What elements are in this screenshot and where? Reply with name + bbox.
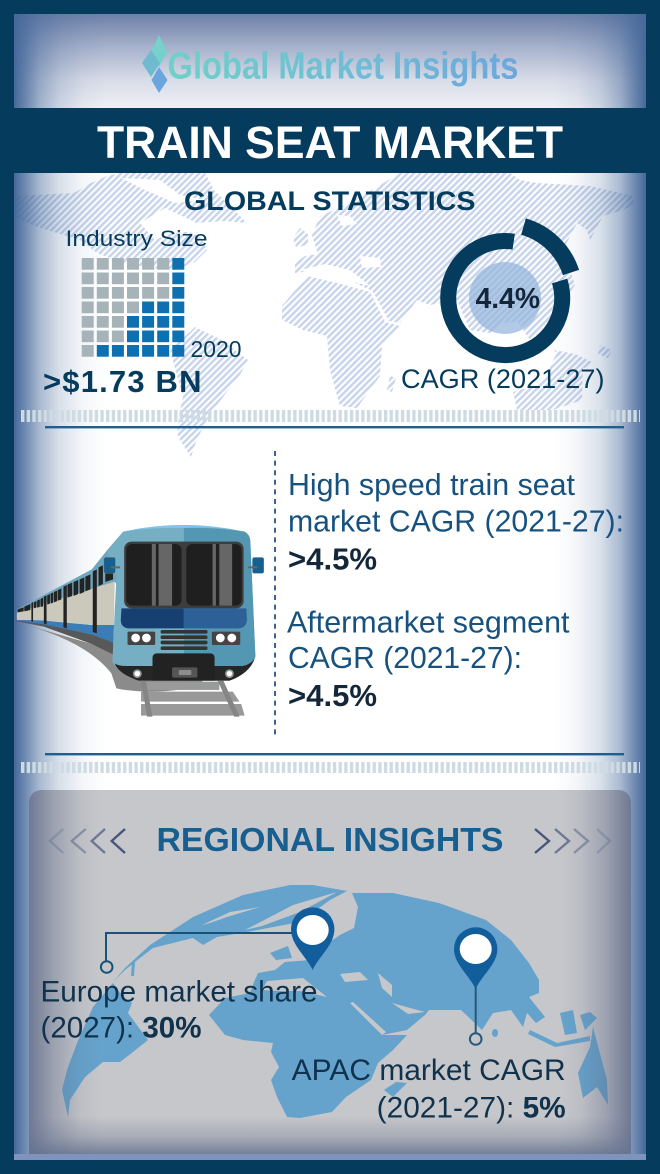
panel: industry size xyxy=(43,226,242,399)
divider xyxy=(45,753,624,755)
text: apac cagr: (2021-27): 5% xyxy=(377,1091,566,1124)
callout: europe xyxy=(40,907,334,1045)
label: industry size: Industry Size xyxy=(66,226,208,251)
globe map xyxy=(62,885,608,1118)
header panel with logo xyxy=(14,14,646,108)
heading: global statistics: GLOBAL STATISTICS xyxy=(184,185,476,216)
icon: left chevrons xyxy=(50,829,125,853)
heading: regional insights: REGIONAL INSIGHTS xyxy=(156,821,504,859)
icon: apac pin xyxy=(454,927,497,989)
panel: regional insights xyxy=(29,790,631,1154)
text block: high speed: >4.5% xyxy=(288,542,377,576)
logo wordmark: Global Market Insights xyxy=(168,44,518,87)
text: apac cagr xyxy=(292,1054,566,1124)
value: cagr: 4.4% xyxy=(476,282,540,314)
panel shading xyxy=(29,790,631,1154)
icon: right chevrons xyxy=(535,829,610,853)
label: year: 2020 xyxy=(190,336,242,362)
callout: apac xyxy=(292,927,566,1124)
text: europe share xyxy=(40,976,318,1045)
text block: aftermarket: CAGR (2021-27): xyxy=(288,642,522,675)
text: europe share: Europe market share xyxy=(40,976,318,1009)
logo mark xyxy=(142,35,168,93)
divider xyxy=(21,410,640,422)
hatched world map xyxy=(14,173,634,457)
label: cagr: CAGR (2021-27) xyxy=(401,363,604,394)
map gaps xyxy=(121,173,537,320)
waffle chart xyxy=(82,258,184,357)
panel background xyxy=(29,790,631,1154)
text block: high speed: market CAGR (2021-27): xyxy=(288,506,624,539)
text block: high speed: High speed train seat xyxy=(288,469,576,502)
value: industry size: >$1.73 BN xyxy=(43,364,202,399)
text block: aftermarket: Aftermarket segment xyxy=(287,606,570,639)
title: TRAIN SEAT MARKET xyxy=(97,117,563,168)
text: europe share: (2027): 30% xyxy=(40,1012,202,1045)
text block: aftermarket xyxy=(287,606,570,713)
bottom strip xyxy=(14,1154,646,1160)
text block: high speed xyxy=(288,469,624,576)
dashed divider xyxy=(274,451,276,737)
donut inner disc xyxy=(469,262,541,334)
donut separated arc xyxy=(524,227,571,272)
text block: aftermarket: >4.5% xyxy=(288,678,377,713)
icon: europe pin xyxy=(291,907,334,970)
icon: train xyxy=(15,525,264,717)
text: apac cagr: APAC market CAGR xyxy=(292,1054,566,1087)
panel: cagr donut xyxy=(401,227,604,394)
donut ring xyxy=(448,241,562,355)
